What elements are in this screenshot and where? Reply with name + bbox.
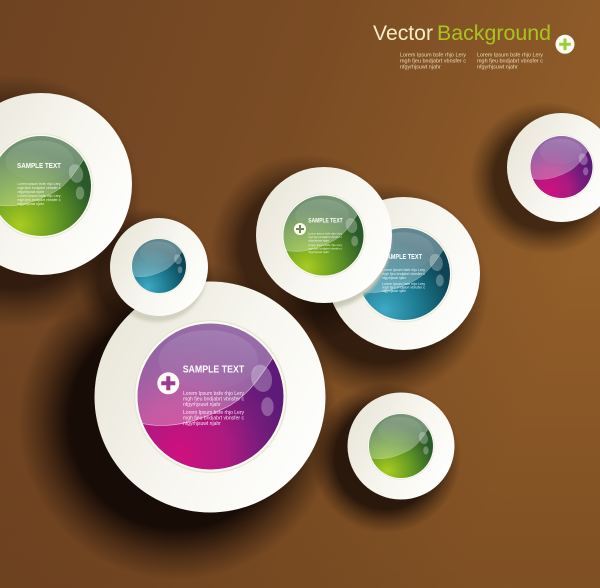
text block: nfgyrhjsuwt njahr — [18, 202, 45, 206]
text block: left column — [400, 52, 466, 70]
plate — [110, 218, 208, 316]
text block: mgh fjeu bndjabrt vbnsfer c — [183, 416, 245, 422]
icon: plus — [157, 372, 179, 394]
text block: nfgyrhjsuwt njahr — [183, 402, 221, 408]
text block: right column: mgh fjeu bndjabrt vbnsfer c — [477, 58, 543, 64]
glass disc — [521, 127, 600, 200]
circle: bottom green — [348, 392, 454, 500]
circle: middle green — [254, 167, 392, 310]
text block — [183, 391, 245, 427]
text block: mgh fjeu bndjabrt vbnsfer c — [18, 186, 61, 190]
text block: mgh fjeu bndjabrt vbnsfer c — [382, 272, 425, 276]
glass disc — [124, 231, 194, 294]
icon: plus — [294, 223, 306, 235]
text block: mgh fjeu bndjabrt vbnsfer c — [18, 198, 61, 202]
text block: right column: Lorem Ipsum bsfe rhjo Lery — [477, 52, 543, 58]
text block: Lorem Ipsum bsfe rhjo Lery — [183, 391, 245, 397]
text block: right column — [477, 52, 543, 70]
glass disc — [344, 214, 464, 322]
text block: Lorem Ipsum bsfe rhjo Lery — [308, 243, 343, 247]
circle: left green — [0, 93, 132, 275]
text block: Lorem Ipsum bsfe rhjo Lery — [18, 194, 61, 198]
text block: Lorem Ipsum bsfe rhjo Lery — [18, 182, 61, 186]
text block: nfgyrhjsuwt njahr — [382, 289, 407, 293]
text block: left column: Lorem Ipsum bsfe rhjo Lery — [400, 52, 466, 58]
text block: nfgyrhjsuwt njahr — [183, 421, 221, 427]
cast shadow on teal plate — [332, 233, 392, 310]
text block — [308, 232, 343, 254]
label: SAMPLE TEXT — [17, 161, 61, 170]
cast shadow on large plate — [130, 282, 207, 323]
text block — [382, 268, 425, 293]
text block: nfgyrhjsuwt njahr — [382, 276, 407, 280]
plate — [256, 167, 392, 303]
text block: Lorem Ipsum bsfe rhjo Lery — [308, 232, 343, 236]
text block: nfgyrhjsuwt njahr — [308, 250, 329, 254]
header: Vector Background — [373, 22, 574, 70]
circle: middle teal — [327, 197, 480, 350]
text block: right column: nfgyrhjsuwt njahr — [477, 64, 518, 70]
text block — [18, 182, 61, 206]
text block: nfgyrhjsuwt njahr — [308, 238, 329, 242]
heading accent: Background — [437, 22, 551, 45]
circle: small teal — [107, 218, 208, 322]
plate — [507, 113, 600, 222]
text block: Lorem Ipsum bsfe rhjo Lery — [382, 268, 425, 272]
icon: plus — [556, 35, 574, 54]
glass disc — [359, 404, 443, 480]
circle: right purple — [507, 113, 600, 222]
text block: Lorem Ipsum bsfe rhjo Lery — [382, 282, 425, 286]
text block: Lorem Ipsum bsfe rhjo Lery — [183, 410, 245, 416]
text block: left column: mgh fjeu bndjabrt vbnsfer c — [400, 58, 466, 64]
glass disc — [0, 121, 106, 238]
text block: nfgyrhjsuwt njahr — [18, 190, 45, 194]
glass disc — [116, 302, 305, 473]
label: SAMPLE TEXT — [183, 363, 245, 375]
text block: mgh fjeu bndjabrt vbnsfer c — [308, 246, 343, 250]
glass disc — [272, 184, 376, 278]
plate — [327, 197, 480, 350]
text block: left column: nfgyrhjsuwt njahr — [400, 64, 441, 70]
plate — [94, 282, 326, 512]
text block: mgh fjeu bndjabrt vbnsfer c — [382, 286, 425, 290]
text block: mgh fjeu bndjabrt vbnsfer c — [183, 396, 245, 402]
heading: Vector — [373, 22, 433, 45]
label: SAMPLE TEXT — [308, 218, 343, 225]
plate — [0, 93, 132, 275]
circle: large purple — [94, 282, 326, 512]
text block: mgh fjeu bndjabrt vbnsfer c — [308, 235, 343, 239]
label: SAMPLE TEXT — [383, 254, 423, 261]
plate — [348, 392, 454, 500]
